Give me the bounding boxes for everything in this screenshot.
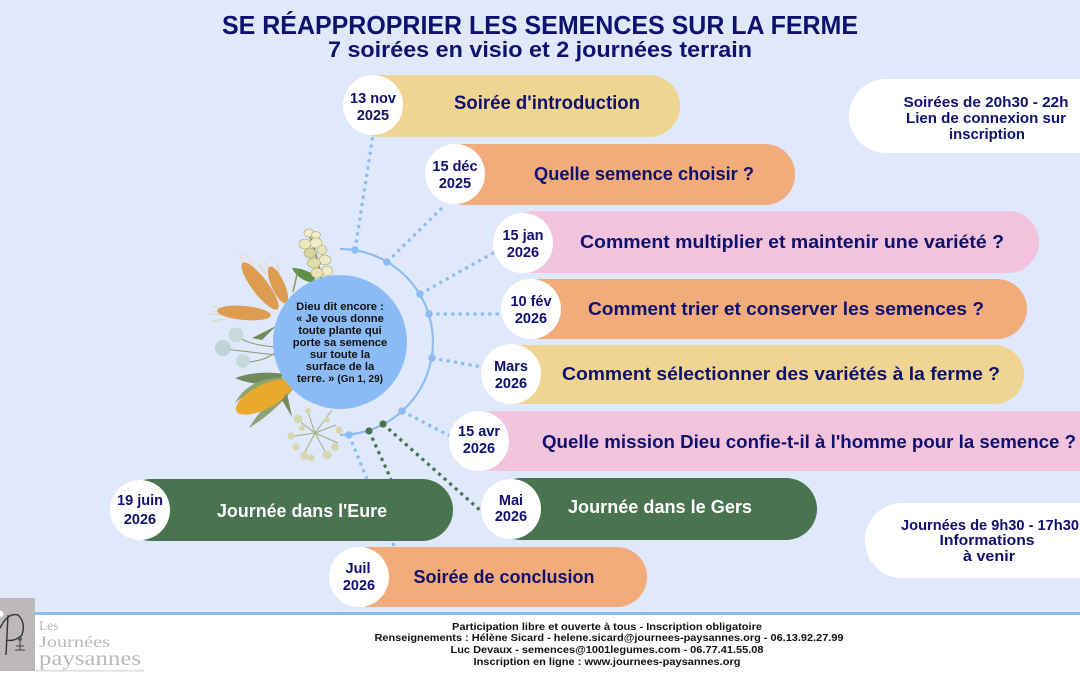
- callout: horaires soirées: Soirées de 20h30 - 22h: [904, 95, 1068, 111]
- verse circle: Dieu dit encore :: [296, 301, 384, 313]
- footer band: [0, 612, 1080, 675]
- panel: sélectionner des variétés: Mars: [494, 359, 528, 375]
- panel: soirée de conclusion: [329, 547, 647, 607]
- logo: Les Journées paysannes: Les: [39, 618, 58, 633]
- panel: mission Dieu: [449, 411, 1080, 471]
- logo: Les Journées paysannes: Journées: [39, 634, 110, 651]
- panel: sélectionner des variétés: [481, 344, 1024, 404]
- panel: trier et conserver: 2026: [515, 311, 547, 327]
- icon: dandelions: [215, 328, 275, 368]
- timeline arc and connectors: [340, 135, 502, 547]
- icon: corn cob: [231, 372, 297, 428]
- panel: multiplier et maintenir: [493, 211, 1039, 273]
- panel: mission Dieu: Quelle mission Dieu confie-t-il à l'homme pour la semence ?: [542, 431, 1076, 452]
- panel: journée dans le Gers: Journée dans le Gers: [568, 496, 752, 517]
- panel: soirée de conclusion: Soirée de conclusion: [414, 566, 594, 587]
- callout: horaires soirées: inscription: [949, 127, 1025, 143]
- panel: multiplier et maintenir: 2026: [507, 245, 539, 261]
- icon: wheat ears: [210, 254, 292, 340]
- panel: sélectionner des variétés: Comment sélectionner des variétés à la ferme ?: [562, 363, 1000, 384]
- footer contact text: [374, 622, 844, 668]
- footer contact text: Inscription en ligne : www.journees-paysannes.org: [474, 657, 740, 668]
- verse circle: sur toute la: [310, 349, 371, 361]
- panel: mission Dieu: 15 avr: [458, 424, 500, 440]
- panel: journée dans le Gers: [481, 478, 817, 540]
- panel: quelle semence choisir: Quelle semence choisir ?: [534, 163, 754, 184]
- callout: horaires soirées: Lien de connexion sur: [906, 111, 1066, 127]
- footer contact text: Participation libre et ouverte à tous - Inscription obligatoire: [452, 622, 762, 633]
- verse circle: toute plante qui: [298, 325, 382, 337]
- panel: quelle semence choisir: 2025: [439, 176, 471, 192]
- panel: trier et conserver: Comment trier et conserver les semences ?: [588, 298, 984, 319]
- title: 7 soirées en visio et 2 journées terrain: [328, 37, 752, 62]
- icon: plant illustration: [210, 229, 342, 462]
- panel: trier et conserver: 10 fév: [510, 294, 552, 310]
- panel: trier et conserver: [501, 279, 1027, 339]
- panel: quelle semence choisir: [425, 144, 795, 205]
- panel: soirée d'introduction: 13 nov: [350, 91, 396, 107]
- panel: soirée de conclusion: 2026: [343, 578, 375, 594]
- footer contact text: Renseignements : Hélène Sicard - helene.sicard@journees-paysannes.org - 06.13.92.27.99: [374, 633, 844, 644]
- panel: journée dans l'Eure: Journée dans l'Eure: [217, 500, 387, 521]
- verse circle: « Je vous donne: [296, 313, 384, 325]
- title: SE RÉAPPROPRIER LES SEMENCES SUR LA FERME: [222, 10, 858, 40]
- panel: journée dans l'Eure: 2026: [124, 512, 156, 528]
- icon: white flower spike: [292, 229, 332, 292]
- verse circle: terre. » (Gn 1, 29): [297, 373, 383, 385]
- panel: multiplier et maintenir: Comment multiplier et maintenir une variété ?: [580, 231, 1004, 252]
- title: [222, 10, 858, 62]
- verse circle: [273, 275, 407, 409]
- logo: Les Journées paysannes: paysannes: [39, 648, 141, 670]
- callout: horaires journées: Informations: [940, 533, 1034, 549]
- callout: horaires soirées: [849, 79, 1080, 153]
- panel: journée dans l'Eure: 19 juin: [117, 493, 163, 509]
- panel: soirée d'introduction: Soirée d'introduction: [454, 93, 640, 114]
- panel: multiplier et maintenir: 15 jan: [502, 228, 544, 244]
- callout: horaires journées: Journées de 9h30 - 17h30: [901, 518, 1079, 534]
- footer contact text: Luc Devaux - semences@1001legumes.com - 06.77.41.55.08: [450, 645, 764, 656]
- panel: journée dans l'Eure: [110, 479, 453, 541]
- callout: horaires journées: [865, 503, 1080, 578]
- panel: quelle semence choisir: 15 déc: [432, 159, 478, 175]
- panel: mission Dieu: 2026: [463, 441, 495, 457]
- verse circle: porte sa semence: [293, 337, 387, 349]
- panel: sélectionner des variétés: 2026: [495, 376, 527, 392]
- callout: horaires journées: à venir: [963, 549, 1015, 565]
- icon: umbel flower: [288, 408, 342, 462]
- panel: soirée d'introduction: [343, 75, 680, 137]
- logo: Les Journées paysannes: [0, 598, 144, 672]
- verse circle: surface de la: [306, 361, 375, 373]
- panel: soirée d'introduction: 2025: [357, 108, 389, 124]
- panel: journée dans le Gers: 2026: [495, 509, 527, 525]
- panel: soirée de conclusion: Juil: [346, 561, 370, 577]
- panel: journée dans le Gers: Mai: [499, 493, 523, 509]
